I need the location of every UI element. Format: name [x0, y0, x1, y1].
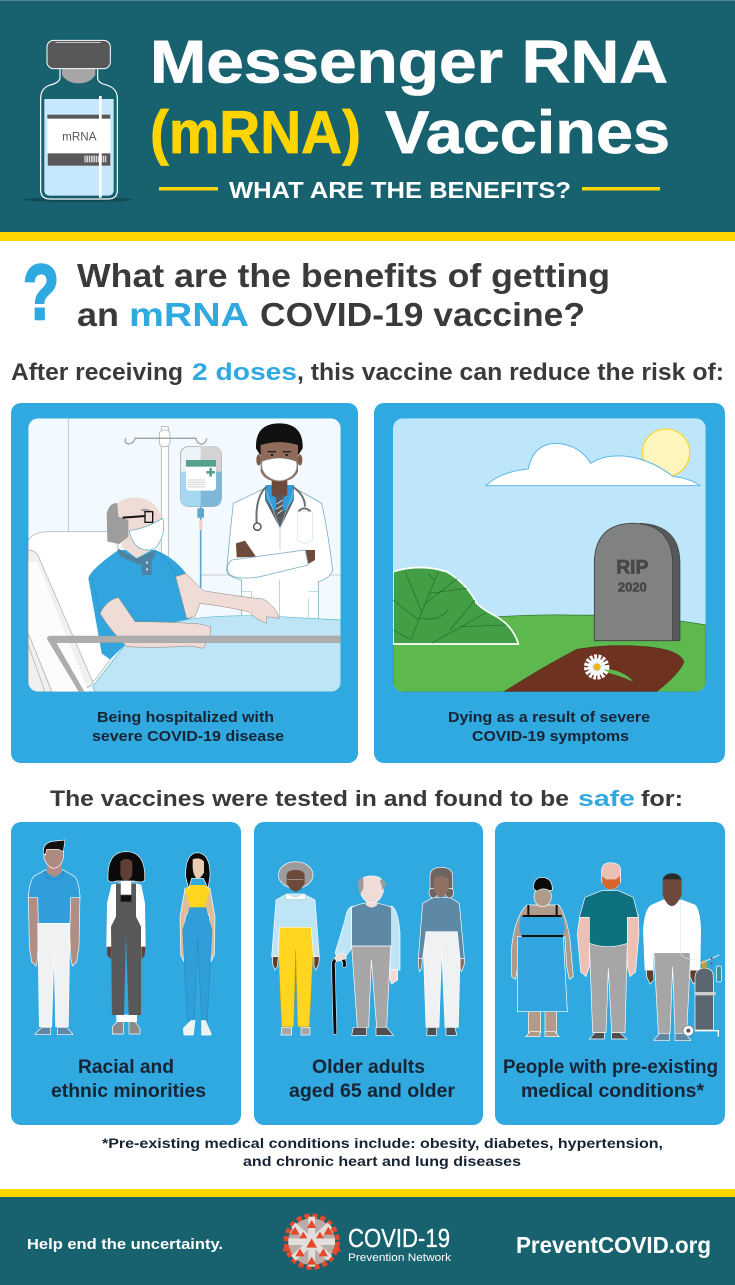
title: Messenger RNA [150, 28, 668, 96]
panel: hospitalized [11, 403, 358, 763]
gravestone: RIP [616, 557, 649, 578]
panel: older adults [254, 822, 483, 1125]
header banner [0, 0, 735, 241]
panel: racial and ethnic minorities [11, 822, 241, 1125]
figures: three adults [28, 840, 215, 1035]
illustration: gravestone landscape [393, 418, 706, 692]
main question heading: an [77, 296, 119, 333]
blanket [93, 616, 341, 692]
footnote [102, 1136, 663, 1169]
panel: pre-existing conditions [495, 822, 725, 1125]
caption [51, 1057, 206, 1102]
section heading: risk reduction [11, 359, 724, 386]
caption [503, 1057, 718, 1102]
tagline: Help end the uncertainty. [27, 1236, 223, 1253]
figure: man in blue polo [28, 840, 80, 1035]
main question heading: COVID-19 vaccine? [260, 296, 585, 333]
patient [88, 497, 195, 659]
figure: older man with cane [333, 876, 400, 1035]
figure: woman in blue sweater [418, 867, 465, 1035]
doctor [227, 423, 333, 620]
section heading: risk reduction: 2 doses [192, 359, 297, 386]
patient arms [100, 573, 279, 648]
figure: man with oxygen [643, 873, 701, 1041]
section heading: safety: safe [578, 786, 635, 811]
caption: Older adults [312, 1057, 425, 1078]
panel: dying [374, 403, 725, 763]
footer banner [0, 1189, 735, 1285]
logo text [348, 1225, 452, 1264]
section heading: risk reduction: After receiving [11, 359, 183, 386]
section heading: safety: for: [641, 786, 683, 811]
figure: older woman [272, 862, 319, 1035]
caption: medical conditions* [521, 1081, 705, 1102]
main question heading: mRNA [129, 296, 249, 333]
caption: Racial and [78, 1057, 174, 1078]
icon: mRNA vaccine vial [23, 40, 133, 202]
gravestone [594, 523, 680, 641]
figures: three adults [512, 863, 721, 1041]
figure: woman in yellow top [180, 853, 215, 1035]
title [150, 28, 670, 166]
logo: coronavirus [282, 1216, 341, 1267]
caption [92, 709, 284, 745]
subtitle: WHAT ARE THE BENEFITS? [229, 177, 571, 203]
caption: Dying as a result of severe [448, 709, 650, 726]
main question heading: What are the benefits of getting [77, 257, 610, 294]
title: (mRNA) [150, 99, 361, 166]
caption [289, 1057, 456, 1102]
icon: question mark: ? [23, 248, 59, 336]
caption [448, 709, 650, 745]
footnote: and chronic heart and lung diseases [243, 1154, 521, 1169]
figure: woman in overalls [107, 852, 145, 1034]
footnote: *Pre-existing medical conditions include: obesity, diabetes, hypertension, [102, 1136, 663, 1151]
caption: Being hospitalized with [97, 709, 274, 726]
bed rail [47, 636, 341, 693]
bush [393, 567, 518, 644]
illustration: patient and doctor in hospital [28, 418, 341, 693]
daisy [588, 658, 633, 682]
figure: man in teal shirt [577, 863, 639, 1039]
section heading: safety: The vaccines were tested in and found to be [50, 786, 569, 811]
caption: People with pre-existing [503, 1057, 718, 1078]
logo text: Prevention Network [348, 1252, 452, 1264]
hospital bed [28, 531, 119, 692]
main question heading [77, 257, 610, 333]
caption: ethnic minorities [51, 1081, 206, 1102]
title: Vaccines [385, 99, 670, 166]
caption: aged 65 and older [289, 1081, 456, 1102]
icon: mRNA vaccine vial: mRNA [62, 130, 97, 143]
section heading: risk reduction: , this vaccine can reduce the risk of: [297, 359, 724, 386]
subtitle [159, 177, 660, 203]
website: PreventCOVID.org [516, 1232, 711, 1258]
gravestone: 2020 [618, 580, 647, 595]
caption: severe COVID-19 disease [92, 728, 284, 745]
icon: oxygen tank [683, 955, 721, 1037]
figure: woman in blue dress [512, 877, 573, 1037]
logo text: COVID-19 [348, 1225, 450, 1253]
caption: COVID-19 symptoms [472, 728, 629, 745]
